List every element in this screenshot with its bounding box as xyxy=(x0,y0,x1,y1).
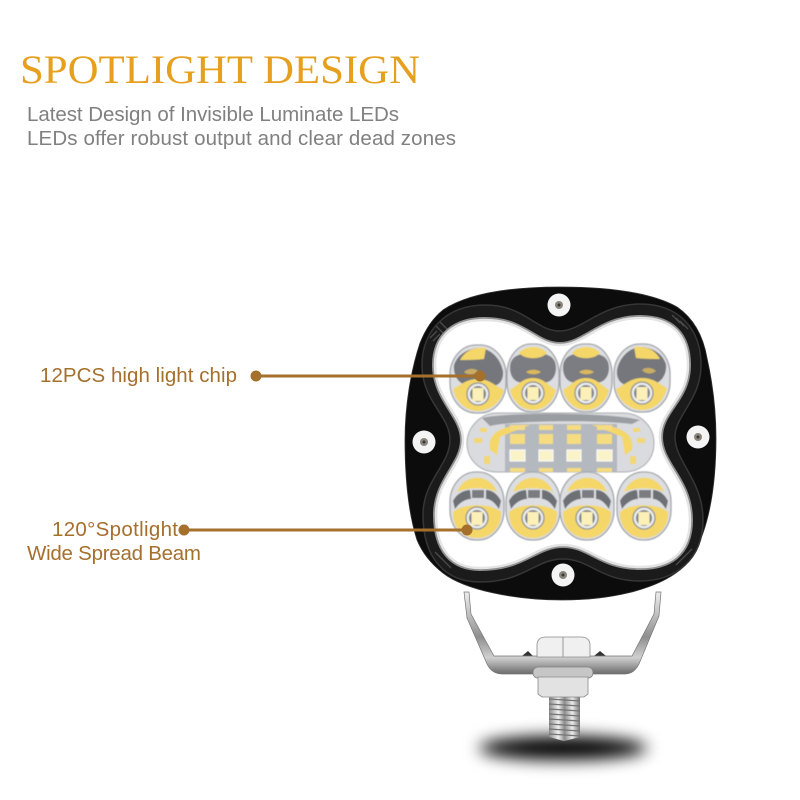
description text: Latest Design of Invisible Luminate LEDs xyxy=(27,103,399,126)
rear nut tips xyxy=(522,651,606,656)
screw: left xyxy=(412,430,436,454)
start dot xyxy=(178,524,190,536)
end dot xyxy=(474,370,486,382)
screw: top xyxy=(548,294,570,316)
description text xyxy=(27,103,456,150)
label: 12PCS high light chip xyxy=(40,364,237,387)
label: 120°Spotlight xyxy=(52,518,178,541)
leader line xyxy=(256,374,480,378)
leader line xyxy=(184,528,467,532)
housing outer shell xyxy=(405,287,716,600)
screw: right xyxy=(686,426,710,448)
title: SPOTLIGHT DESIGN xyxy=(20,47,420,92)
bracket xyxy=(464,592,661,674)
upper hex nut xyxy=(537,637,590,657)
bolt xyxy=(549,695,580,741)
washer xyxy=(533,667,593,678)
callout: 120 degree spotlight xyxy=(27,518,472,565)
ground shadow xyxy=(479,736,647,760)
vent ridges xyxy=(430,315,692,568)
lens window xyxy=(435,318,690,568)
label: Wide Spread Beam xyxy=(27,542,201,565)
callout: 12PCS high light chip xyxy=(40,364,486,387)
screw: bottom xyxy=(552,564,574,586)
description text: LEDs offer robust output and clear dead zones xyxy=(27,127,456,150)
lamp housing xyxy=(405,287,716,600)
top row of LED lenses xyxy=(450,344,670,413)
lower hex nut xyxy=(538,677,588,697)
end dot xyxy=(462,524,472,536)
start dot xyxy=(250,370,262,382)
centre LED strip xyxy=(467,413,654,472)
housing inner ridge xyxy=(422,304,703,582)
label xyxy=(27,518,201,565)
mounting bracket and bolt xyxy=(464,592,661,741)
bottom row of LED lenses xyxy=(450,472,671,540)
